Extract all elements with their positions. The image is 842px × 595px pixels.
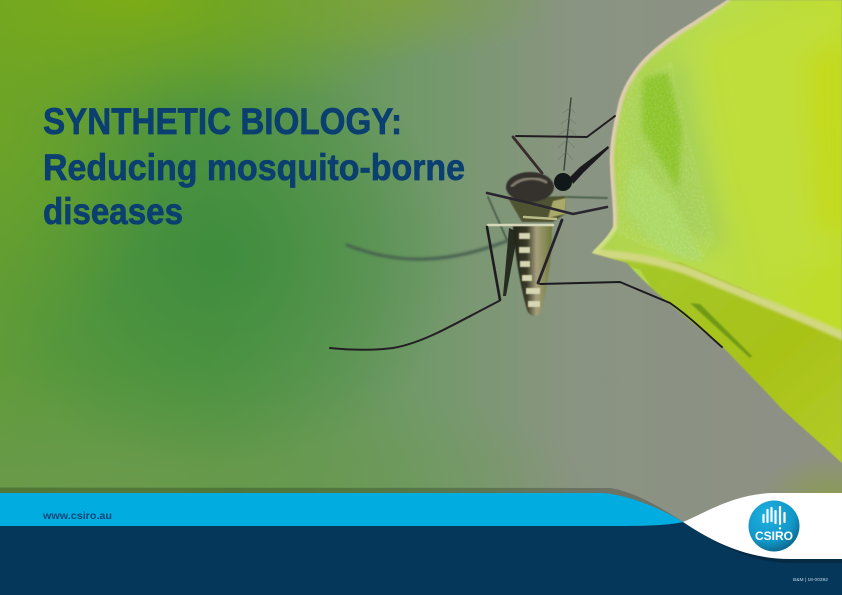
logo wordmark: CSIRO [755, 531, 793, 543]
title line 1: SYNTHETIC BIOLOGY: [43, 101, 402, 142]
footer shadow strip [0, 488, 683, 526]
white panel shadow [683, 522, 842, 563]
reference code: B&M | 18-00392 [793, 577, 828, 582]
thorax [506, 172, 566, 222]
leaf rim [590, 0, 842, 337]
hind leg right [538, 220, 722, 347]
head [554, 173, 572, 191]
blurred back leg [347, 241, 507, 259]
mosquito [330, 98, 722, 350]
leaf vein [625, 72, 705, 262]
footer band [0, 488, 842, 595]
abdomen stripes [519, 236, 540, 304]
navy base [0, 522, 842, 595]
white panel [683, 493, 842, 559]
front leg upper [513, 116, 615, 173]
CSIRO logo [748, 500, 800, 552]
logo dot [779, 527, 781, 530]
leaf body [585, 0, 842, 470]
cyan band [0, 493, 683, 526]
logo circle [748, 500, 800, 552]
title [43, 101, 465, 232]
title line 2: Reducing mosquito-borne [43, 147, 465, 188]
logo bars [764, 507, 784, 524]
title line 3: diseases [43, 191, 183, 232]
wing [503, 228, 518, 296]
leaf [585, 0, 842, 470]
antenna [558, 98, 576, 170]
proboscis [570, 146, 609, 184]
middle leg [487, 193, 607, 214]
leaf hair speckles [618, 63, 714, 262]
url: www.csiro.au [42, 510, 112, 522]
abdomen [513, 226, 552, 316]
far legs [488, 197, 607, 240]
hind leg left [330, 225, 553, 350]
leaf underside [610, 258, 842, 462]
